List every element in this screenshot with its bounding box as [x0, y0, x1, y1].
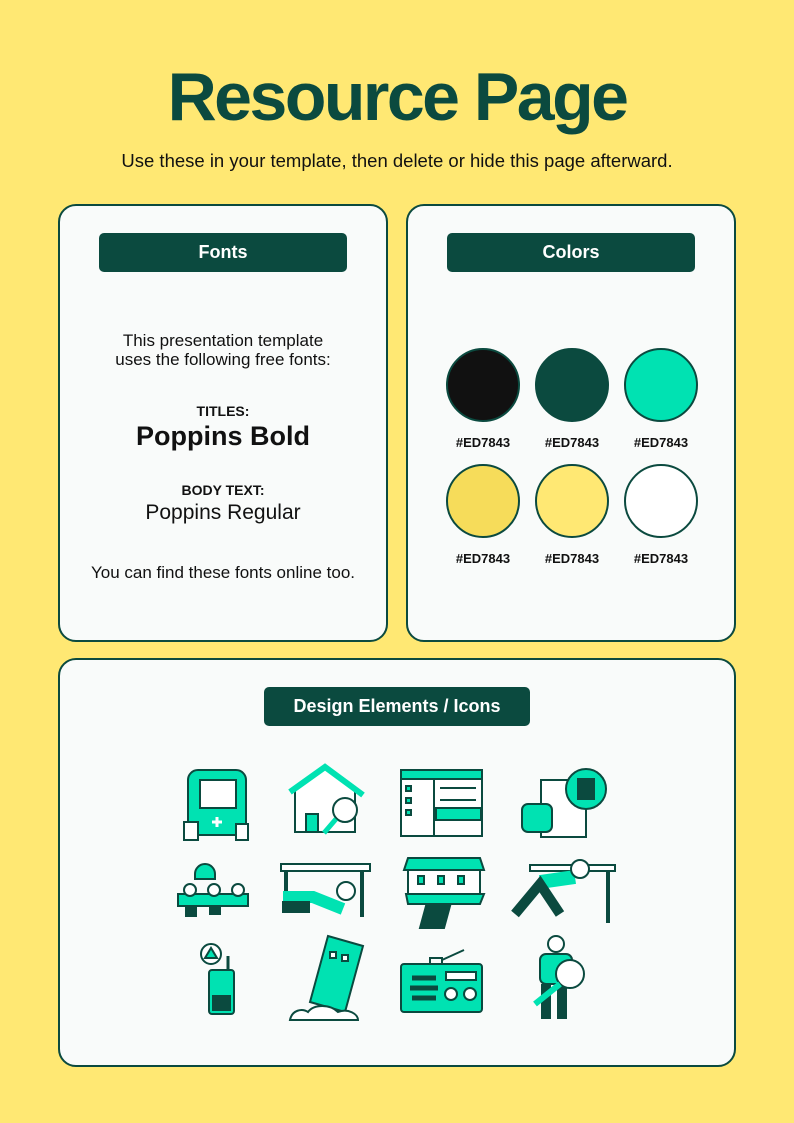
panel: fonts	[58, 204, 388, 642]
heading: colors	[447, 233, 695, 272]
heading: design elements: Design Elements / Icons	[293, 696, 501, 716]
swatches: #ED7843	[634, 551, 688, 566]
icon: floor plan	[401, 770, 482, 836]
heading: fonts: Fonts	[198, 242, 248, 262]
text: titles font: TITLES:	[197, 403, 249, 419]
icon grid	[177, 763, 616, 1021]
text: titles font: Poppins Bold	[136, 421, 310, 451]
text: intro	[115, 331, 331, 369]
title: Resource Page	[168, 59, 626, 135]
heading: design elements	[264, 687, 530, 726]
icon: radio	[401, 950, 482, 1012]
text: titles font	[136, 403, 310, 451]
swatches: #ED7843	[545, 551, 599, 566]
icon: leaning building	[290, 936, 363, 1020]
swatches: #ED7843	[456, 435, 510, 450]
icon: person under table	[281, 864, 370, 917]
text: intro: This presentation template	[123, 331, 323, 350]
text: body font	[145, 482, 301, 524]
icon: collapsing house	[404, 858, 484, 928]
swatches: #ED7843	[456, 551, 510, 566]
text: body font: Poppins Regular	[145, 501, 301, 524]
swatches: #ED7843	[545, 435, 599, 450]
swatches	[446, 348, 698, 566]
heading: fonts	[99, 233, 347, 272]
icon: person with magnifier	[535, 936, 584, 1019]
icon: first aid cabinet	[522, 769, 606, 837]
icon: alarm people	[178, 864, 248, 916]
heading: colors: Colors	[542, 242, 600, 262]
icon: backpack	[184, 770, 248, 840]
icon: person crawling under desk	[515, 860, 615, 923]
text: footer: You can find these fonts online too.	[91, 563, 355, 582]
icon: walkie talkie	[201, 944, 234, 1014]
icon: cracked house	[290, 765, 363, 833]
swatches: #ED7843	[634, 435, 688, 450]
subtitle: Use these in your template, then delete or hide this page afterward.	[121, 150, 673, 171]
text: intro: uses the following free fonts:	[115, 350, 331, 369]
panel: design elements	[58, 658, 736, 1067]
text: body font: BODY TEXT:	[182, 482, 264, 498]
panel: colors	[406, 204, 736, 642]
